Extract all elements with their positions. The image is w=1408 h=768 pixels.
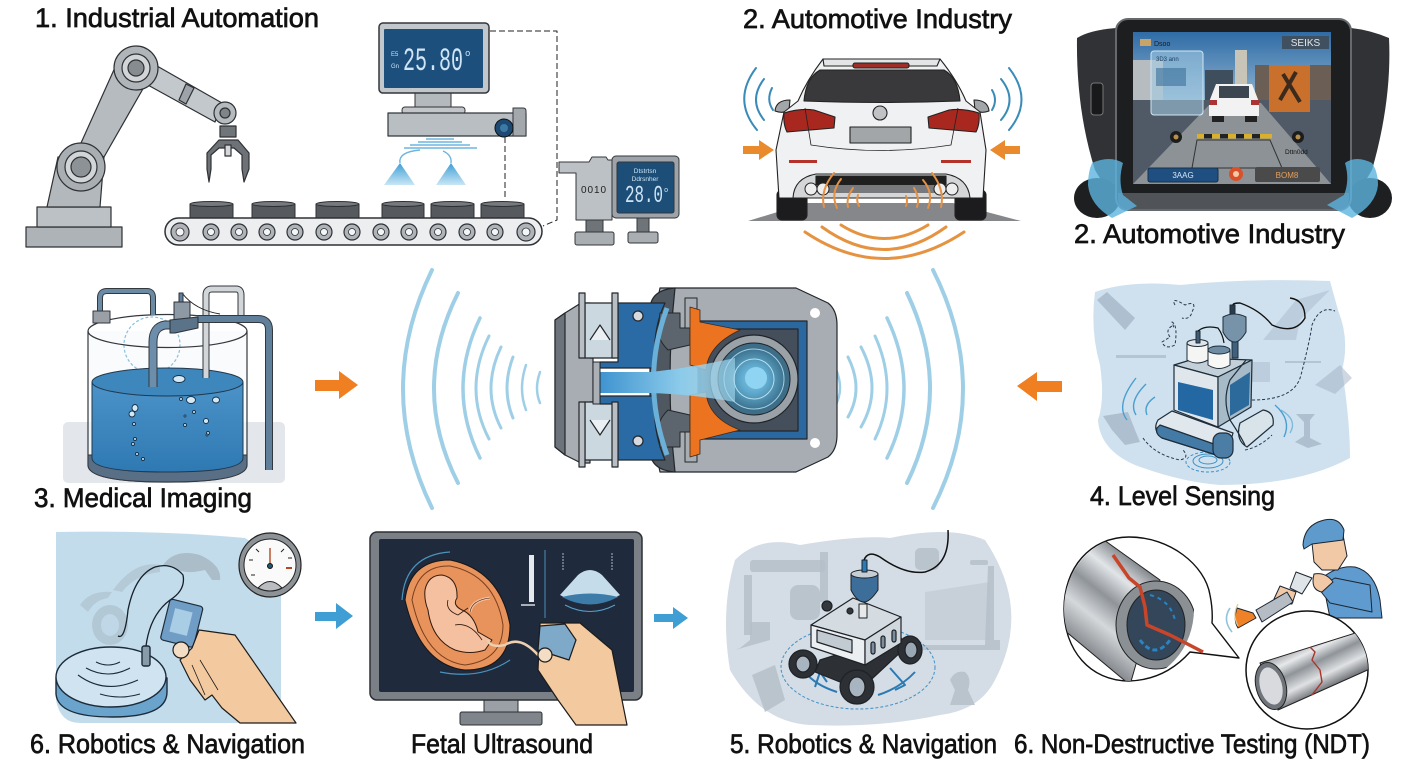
lens	[710, 335, 798, 423]
sensor bar and beam	[384, 108, 526, 185]
title: 1. Industrial Automation: 1. Industrial Automation	[35, 3, 319, 33]
hand	[173, 630, 296, 723]
panel: level sensing robot	[1093, 280, 1352, 485]
motion arrows	[805, 668, 915, 695]
controller unit	[559, 156, 679, 245]
panel: non-destructive testing	[1040, 519, 1382, 729]
title: 3. Medical Imaging: 3. Medical Imaging	[34, 483, 252, 513]
hazard stripe	[1197, 134, 1272, 138]
title: 6. Non-Destructive Testing (NDT): 6. Non-Destructive Testing (NDT)	[1014, 729, 1370, 759]
car body	[775, 59, 989, 220]
dashed signal wires	[490, 31, 557, 226]
panel: navigation sensor hand	[56, 532, 301, 723]
rover	[789, 598, 922, 704]
ultrasonic probe	[1226, 592, 1293, 632]
title: 2. Automotive Industry (lower): 2. Automotive Industry	[1074, 219, 1346, 249]
controller unit: Dtstrtsn	[634, 168, 657, 175]
under-bumper sensor waves	[823, 173, 942, 208]
tracks	[1156, 410, 1273, 458]
sound waves left	[403, 270, 540, 508]
gauge	[239, 533, 301, 597]
orange horn	[690, 307, 740, 457]
monitor with reading: o	[465, 49, 470, 59]
arrow: navigation to fetal ultrasound	[315, 603, 353, 629]
arrow: fetal ultrasound to robotics	[654, 607, 688, 629]
holographic data panel	[1151, 51, 1203, 115]
sound waves right	[820, 270, 963, 508]
ground sonar arcs	[805, 225, 964, 258]
screen: SEIKS	[1291, 38, 1321, 49]
title: 2. Automotive Industry (top): 2. Automotive Industry	[743, 4, 1013, 34]
blue sensor waves	[744, 68, 1022, 130]
dashed beam circle	[124, 317, 180, 373]
screen: 3D3 ann	[1156, 57, 1179, 63]
title: 4. Level Sensing: 4. Level Sensing	[1090, 481, 1275, 511]
tank rim	[88, 314, 247, 348]
transducer housing	[650, 288, 837, 472]
monitor with reading: Gn	[391, 64, 399, 70]
sonar waves	[1123, 378, 1293, 437]
magnified callout bubble	[1063, 536, 1240, 682]
center: ultrasonic transducer	[403, 270, 963, 508]
panel: industrial automation	[26, 23, 679, 247]
robot housing	[1174, 358, 1252, 445]
panel: fetal ultrasound monitor	[370, 532, 642, 725]
handheld transducer	[160, 599, 203, 648]
panel: robotics and navigation	[726, 530, 1011, 726]
inner dark mounts	[658, 298, 697, 462]
screen: BOM8	[1276, 171, 1299, 180]
junction box	[93, 311, 110, 323]
ghost machinery	[80, 553, 220, 645]
worker	[1274, 519, 1382, 618]
ground ripple	[1186, 452, 1230, 472]
shadow	[63, 422, 285, 483]
monitor stand	[460, 700, 542, 725]
orange arrows	[743, 140, 1020, 160]
dashed scan ellipse	[781, 625, 935, 709]
cracked pipe closeup	[1064, 542, 1194, 681]
bottom buttons	[1148, 168, 1218, 182]
water	[92, 368, 243, 472]
screen: Dsoo	[1154, 41, 1170, 48]
translucent blue sensor beams	[1088, 159, 1378, 218]
screen	[379, 539, 634, 692]
bubbles	[129, 376, 220, 460]
inset circle: pipe with crack	[1246, 611, 1372, 729]
arrow: level sensing to center	[1017, 372, 1062, 401]
panel: car rear with sensors	[743, 59, 1022, 258]
curved blue diaphragm	[654, 308, 667, 455]
proximity markers	[1170, 131, 1182, 143]
sonogram fan	[560, 570, 620, 612]
controller unit: 28.0	[625, 183, 663, 210]
screen	[1133, 32, 1331, 184]
monitor with reading: E5	[391, 52, 399, 58]
watercolor background	[1093, 280, 1350, 485]
screen: Dttn0dd	[1285, 149, 1308, 156]
top sensor with cable	[1198, 298, 1305, 358]
panel: dashboard parking display	[1074, 19, 1392, 218]
chin	[1118, 193, 1349, 209]
orange alert panel	[1269, 65, 1310, 112]
robot arm	[26, 46, 249, 247]
uterus with fetus	[402, 552, 510, 674]
controller unit: Ddrsnher	[632, 176, 659, 183]
monitor with reading	[379, 23, 489, 114]
controller unit: 0010	[581, 185, 606, 196]
wires	[118, 566, 183, 646]
ghost objects	[1097, 290, 1352, 448]
dashed paths	[1143, 300, 1335, 460]
rover sensor with cable	[851, 530, 948, 618]
pipes	[100, 289, 269, 470]
white canisters	[1187, 331, 1230, 368]
title: 6. Robotics & Navigation (left): 6. Robotics & Navigation	[30, 729, 305, 759]
tank body	[88, 331, 247, 482]
level sensor	[170, 293, 198, 333]
left cap and blue section	[555, 293, 665, 467]
blue background	[56, 532, 281, 723]
title: Fetal Ultrasound: Fetal Ultrasound	[411, 729, 593, 759]
panel: medical imaging tank	[63, 289, 285, 483]
tank base	[88, 455, 247, 482]
ghost machinery	[735, 548, 1000, 712]
watercolor background	[726, 532, 1011, 726]
top tags	[1282, 36, 1329, 49]
rear car on screen	[1209, 84, 1259, 122]
measurement bar	[521, 550, 612, 618]
side camera switch	[1091, 83, 1103, 115]
monitor frame	[370, 532, 642, 700]
central beam	[593, 358, 735, 404]
sensing disc	[56, 646, 167, 717]
arrow: medical to center	[315, 371, 358, 399]
sensor pods	[1074, 178, 1392, 218]
conveyor belt with cups	[165, 202, 542, 245]
controller unit: o	[664, 187, 668, 195]
screen: 3AAG	[1172, 171, 1194, 180]
ground	[748, 203, 1021, 221]
hand with probe	[488, 623, 627, 725]
dash housing	[1077, 28, 1389, 205]
title: 5. Robotics & Navigation: 5. Robotics & Navigation	[730, 729, 997, 759]
monitor with reading: 25.80	[403, 43, 463, 80]
exhaust tips	[805, 183, 958, 195]
bezel	[1116, 19, 1351, 210]
